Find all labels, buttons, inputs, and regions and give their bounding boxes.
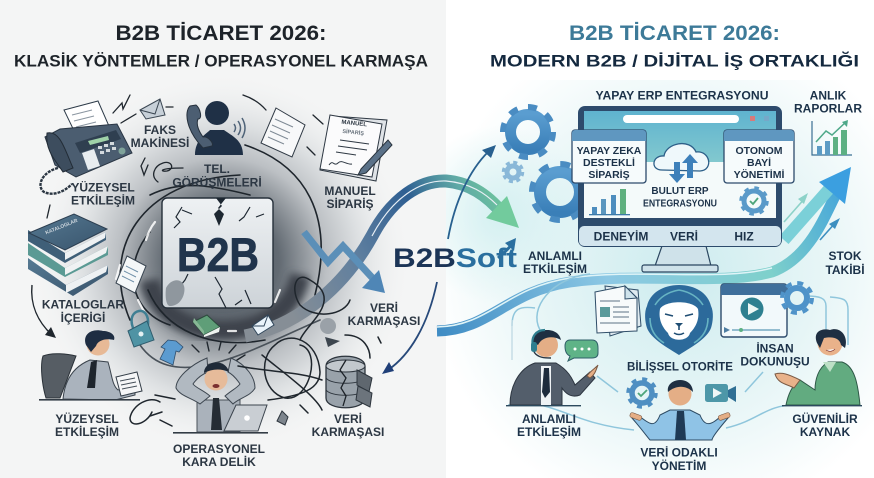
icon: documents (595, 286, 641, 336)
illustration: monitor (572, 106, 794, 272)
label: veri odakli yonetim: YÖNETİM (652, 458, 706, 473)
title: left heading (14, 21, 428, 70)
label: anlamli etkilesim upper: ETKİLEŞİM (523, 261, 587, 276)
icon: manual order form with pen: MANUEL (341, 120, 368, 128)
window: yapay zeka (572, 130, 646, 183)
label: operasyonel: KARA DELİK (182, 454, 256, 469)
chart: screen bars (589, 189, 630, 215)
label: operasyonel: OPERASYONEL (173, 442, 265, 456)
arrow: thin blue rising (448, 145, 496, 239)
title: left heading: KLASİK YÖNTEMLER / OPERASYONEL KARMAŞA (14, 52, 428, 70)
label: bulut erp (643, 186, 717, 210)
icon: padlock (128, 311, 154, 347)
window: otonom bayi: OTONOM (735, 145, 783, 157)
label: yapay erp: YAPAY ERP ENTEGRASYONU (596, 88, 768, 102)
illustration: tangled data scribbles (130, 277, 381, 426)
icon: small gear (504, 162, 522, 182)
icon: video window (721, 284, 787, 337)
illustration: agent with headset (506, 330, 598, 406)
icon: chat bubble (565, 340, 598, 361)
icon: large gear top (503, 107, 553, 157)
illustration: data manager (629, 380, 731, 440)
icon: money stack (193, 315, 220, 337)
label: veri karmasasi lower: KARMAŞASI (312, 425, 384, 439)
icon: cloud (654, 144, 709, 183)
chart: anlik raporlar (812, 120, 852, 155)
label: telefon: GÖRÜŞMELERİ (172, 174, 262, 190)
label: veri karmasasi upper: VERİ (370, 300, 398, 315)
icon: fax machine (40, 101, 132, 194)
label: bilissel otorite: BİLİŞSEL OTORİTE (627, 358, 733, 374)
bar strip: VERİ (670, 228, 698, 244)
icon: lightning scribble and strokes (47, 95, 323, 218)
label: anlamli etkilesim lower: ETKİLEŞİM (517, 424, 581, 439)
label: yuzeysel top: YÜZEYSEL (71, 180, 135, 194)
icon: video camera (705, 384, 736, 402)
panel: central B2B tile (162, 198, 273, 308)
label: stok takibi: STOK (828, 249, 862, 263)
icon: manual order form with pen (320, 115, 392, 181)
connector lines (508, 274, 860, 430)
arrow: long blue-green ribbon (437, 167, 851, 331)
arrow: dark blue curve to database (382, 282, 437, 374)
label: guvenilir kaynak: KAYNAK (800, 425, 850, 439)
label: anlamli etkilesim lower: ANLAMLI (522, 412, 576, 426)
illustration: support person in green (775, 329, 862, 406)
bar strip: DENEYİM (594, 228, 648, 244)
label: kataloglar: İÇERİGİ (61, 310, 105, 325)
title: left heading: B2B TİCARET 2026: (116, 21, 326, 45)
arrow: grey to blue ribbon toward green head (245, 181, 519, 336)
search bar (623, 115, 739, 123)
label: faks: MAKİNESİ (131, 135, 189, 150)
icon: phone caller silhouette (187, 101, 245, 155)
window: otonom bayi (724, 130, 794, 183)
label: veri karmasasi lower: VERİ (334, 411, 362, 426)
label: manuel siparis: MANUEL (324, 184, 376, 198)
icon: cracked database (277, 356, 372, 425)
window: yapay zeka: YAPAY ZEKA (577, 145, 642, 157)
logo: B2BSoft: B2B Soft (393, 243, 517, 273)
panel: black hole vortex (32, 72, 412, 452)
label: yuzeysel lower: ETKİLEŞİM (55, 424, 119, 439)
label: veri odakli yonetim: VERİ ODAKLI (640, 444, 718, 460)
icon: gear video (782, 283, 812, 313)
icon: catalog stack of books (28, 214, 108, 296)
icon: lion head emblem (645, 285, 713, 355)
label: anlik raporlar: ANLIK (810, 88, 847, 102)
window: otonom bayi: BAYİ (747, 156, 771, 169)
icon: manual order form with pen: SİPARİŞ (342, 128, 365, 137)
label: kataloglar: KATALOGLAR (42, 298, 124, 312)
title: right heading (490, 21, 859, 70)
illustration: stressed man at laptop (173, 342, 268, 434)
label: bulut erp: ENTEGRASYONU (643, 198, 717, 210)
icon: catalog stack of books: KATALOGLAR (45, 218, 79, 236)
label: anlik raporlar: RAPORLAR (794, 102, 862, 116)
icon: envelope swirl (252, 315, 274, 335)
label: insan dokunusu: İNSAN (756, 340, 794, 356)
illustration: man at desk (39, 330, 142, 401)
bar strip: HIZ (734, 230, 754, 244)
icon: envelope top (140, 99, 165, 119)
bar strip (579, 226, 781, 246)
title: right heading: MODERN B2B / DİJİTAL İŞ ORTAKLIĞI (490, 52, 859, 70)
window: yapay zeka: DESTEKLİ (583, 156, 635, 169)
icon: floating document (261, 108, 305, 157)
title: right heading: B2B TİCARET 2026: (569, 21, 780, 45)
background: right panel (446, 0, 874, 478)
monitor stand (642, 246, 718, 272)
label: bulut erp: BULUT ERP (651, 186, 709, 197)
label: anlamli etkilesim upper: ANLAMLI (528, 249, 582, 263)
label: yuzeysel top: ETKİLEŞİM (71, 192, 135, 208)
labels: left panel (42, 123, 420, 469)
label: telefon: TEL. (204, 162, 230, 176)
label: guvenilir kaynak: GÜVENİLİR (792, 411, 858, 426)
window: yapay zeka: SİPARİŞ (588, 168, 630, 181)
window: otonom bayi: YÖNETİMİ (734, 168, 784, 181)
arrow: catalog to man (32, 285, 56, 338)
icon: floating document left (116, 256, 146, 293)
background: left panel (0, 0, 446, 478)
arrow: zigzag falling data (304, 232, 385, 293)
icon: shirt (160, 340, 183, 365)
label: veri karmasasi upper: KARMAŞASI (348, 314, 420, 328)
label: manuel siparis: SİPARİŞ (326, 196, 374, 211)
icon: large gear lower (532, 164, 588, 220)
label: faks: FAKS (144, 123, 176, 137)
label: insan dokunusu: DOKUNUŞU (740, 354, 810, 368)
icon: gear with check (741, 188, 767, 214)
text: B2B: B2B (177, 228, 259, 281)
label: yuzeysel lower: YÜZEYSEL (55, 411, 119, 426)
label: stok takibi: TAKİBİ (825, 262, 865, 277)
icon: gear check (628, 379, 656, 407)
